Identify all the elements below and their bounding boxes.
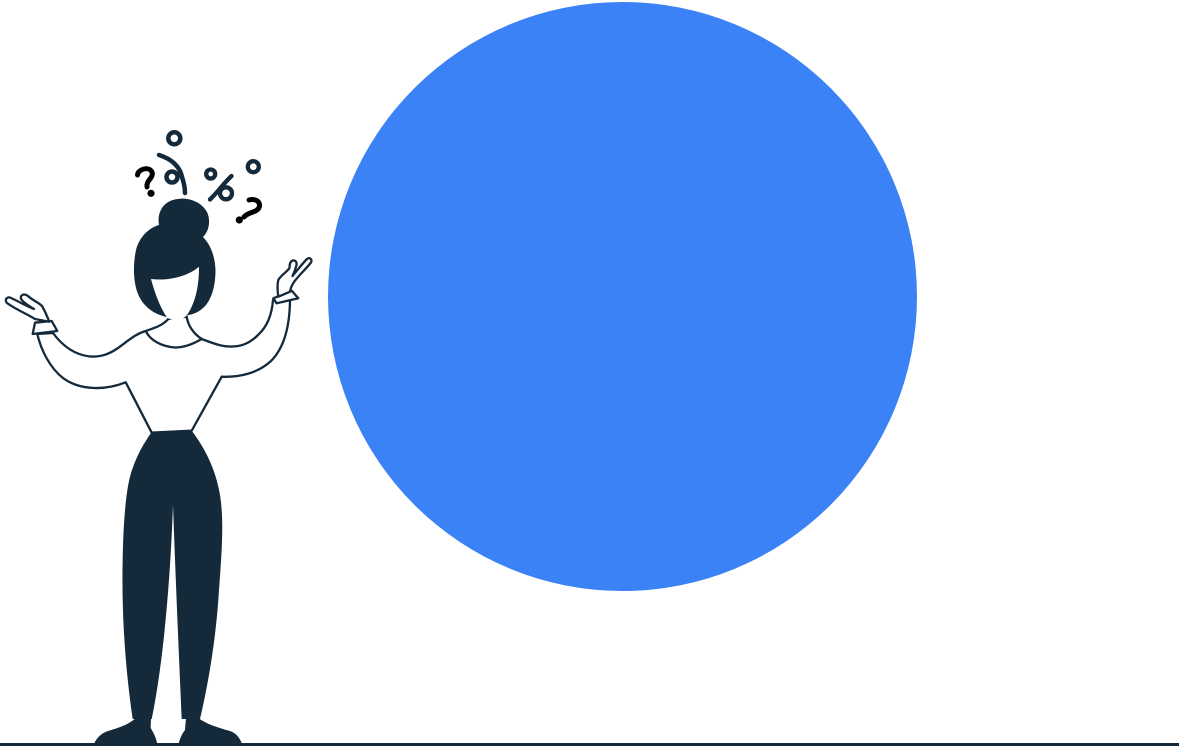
right hand [278,258,311,297]
symbol: top circle [168,132,180,144]
right shoe [178,718,242,744]
collar [146,331,202,348]
symbol: right question mark [236,200,260,224]
symbol: nine shape [159,155,185,193]
left shoe [94,718,157,744]
trousers [122,431,222,719]
left cuff [33,321,57,334]
symbol: percent sign [206,170,232,200]
hair [134,199,216,317]
blue circle [328,2,917,591]
symbol: right circle [248,161,259,172]
left hand [6,295,49,322]
blouse and arms [6,258,311,433]
ground line [0,743,1179,746]
thought symbols: confusion [138,132,260,224]
figure: woman shrugging [6,199,311,744]
face and neck [151,267,199,320]
symbol: left question mark [138,169,155,197]
right cuff [273,291,298,303]
